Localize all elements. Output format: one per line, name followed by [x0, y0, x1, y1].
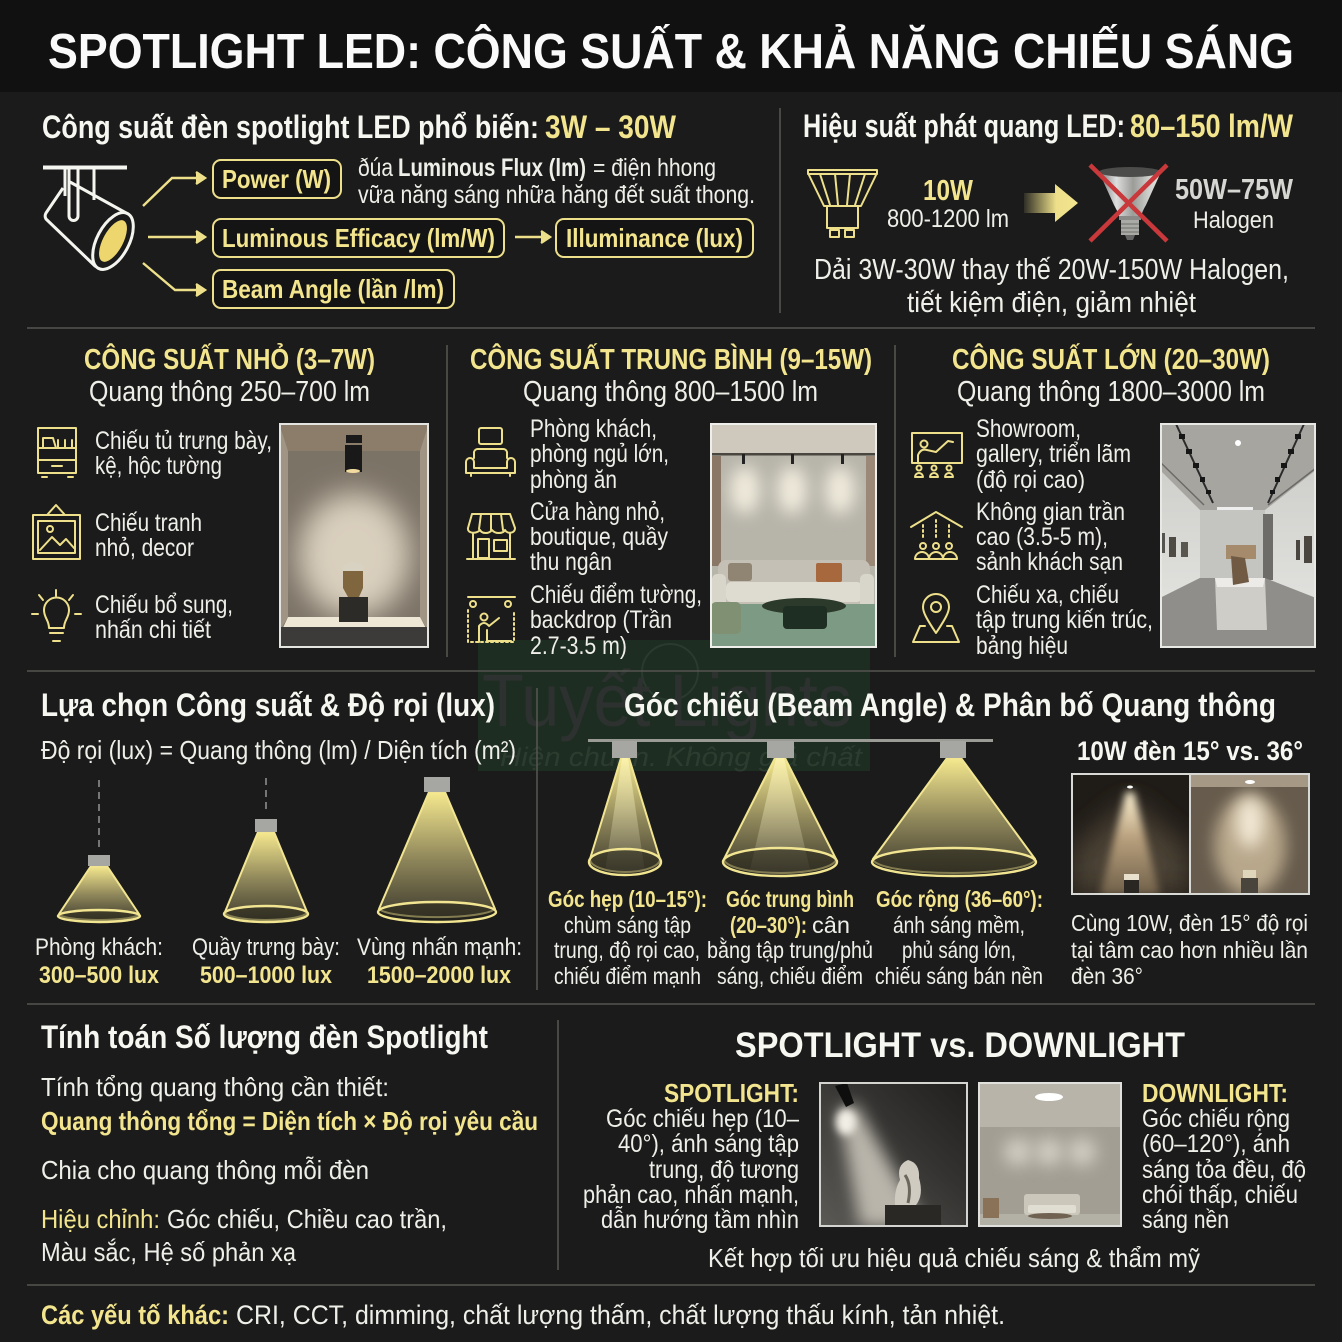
icon: shelf	[38, 428, 76, 477]
text: narrow beam	[548, 886, 707, 989]
cone: accent zone	[378, 777, 496, 922]
arrow: to power	[143, 172, 205, 206]
text: 10W: 800-1200 lm	[887, 205, 1009, 233]
cone: medium beam	[723, 741, 837, 876]
photo: beam comparison	[1071, 773, 1310, 895]
text: 50W-75W halogen	[1175, 174, 1294, 234]
cone: wide beam	[872, 741, 1036, 876]
heading: medium power: CÔNG SUẤT TRUNG BÌNH (9–15W)	[470, 342, 872, 376]
heading: high power: CÔNG SUẤT LỚN (20–30W)	[952, 342, 1270, 376]
text: paintings: nhỏ, decor	[95, 534, 194, 562]
text: range replacement: tiết kiệm điện, giảm nhiệt	[907, 287, 1196, 319]
heading: low power: CÔNG SUẤT NHỎ (3–7W)	[84, 342, 375, 376]
label: display lux: Quầy trưng bày:	[192, 934, 340, 961]
text: downlight description: (60–120°), ánh	[1142, 1130, 1290, 1158]
text: spotlight description: Góc chiếu hẹp (10–	[606, 1105, 799, 1133]
text: combined benefit: Kết hợp tối ưu hiệu quả chiếu sáng & thẩm mỹ	[708, 1243, 1200, 1273]
text: medium beam: (20–30°):	[730, 912, 807, 938]
text: wide beam: Góc rộng (36–60°):	[876, 886, 1043, 912]
text: narrow beam: chùm sáng tập	[564, 912, 691, 938]
heading: low power: Quang thông 250–700 lm	[89, 376, 370, 408]
label: living room lux: 300–500 lux	[39, 962, 160, 989]
text: showroom: (độ rọi cao)	[976, 466, 1085, 494]
footer: other factors: Các yếu tố khác:	[41, 1300, 229, 1330]
text: wide beam: ánh sáng mềm,	[893, 912, 1025, 938]
text: downlight description: chói thấp, chiếu	[1142, 1181, 1298, 1209]
text: 50W-75W halogen: Halogen	[1193, 207, 1274, 234]
text: adjustments: Góc chiếu, Chiều cao trần,	[167, 1204, 447, 1234]
text: medium beam	[707, 886, 873, 989]
panel: common wattage	[42, 109, 755, 308]
photo: gallery	[1160, 423, 1316, 648]
watermark: Tuyết Lights	[482, 659, 852, 742]
text: high ceiling: sảnh khách sạn	[976, 548, 1123, 576]
text: divide per lamp: Chia cho quang thông mỗi đèn	[41, 1155, 369, 1185]
watermark: Hiện chuẩn. Không giả chất	[500, 742, 864, 772]
heading: low power	[84, 342, 375, 408]
text: 10W	[887, 175, 1009, 233]
icon: map pin	[913, 594, 959, 642]
arrow: LED replaces halogen	[1024, 184, 1078, 222]
text: paintings: Chiếu tranh	[95, 509, 202, 537]
heading: common wattage: 3W – 30W	[545, 109, 677, 145]
text: 50W-75W halogen: 50W–75W	[1175, 174, 1294, 206]
text: downlight description: sáng nền	[1142, 1206, 1229, 1234]
label: luminous efficacy	[213, 219, 504, 257]
panel: choosing wattage and lux	[35, 687, 522, 989]
heading: efficacy: 80–150 lm/W	[1130, 108, 1294, 144]
arrow: to beam angle	[143, 263, 205, 296]
label: beam angle: Beam Angle (lần /lm)	[222, 274, 444, 304]
panel: 15 vs 36 degree comparison	[1071, 736, 1310, 989]
text: cabinets	[95, 427, 272, 480]
text: range replacement	[814, 254, 1289, 319]
footer: other factors: CRI, CCT, dimming, chất lượng thấm, chất lượng thấu kính, tản nhiệt.	[236, 1300, 1005, 1330]
icon: high ceiling hall	[911, 512, 962, 559]
text: living rooms	[530, 415, 669, 494]
icon: wall spot with figure	[468, 597, 515, 642]
text: long range: bảng hiệu	[976, 632, 1068, 660]
photo: spotlight on statue	[819, 1082, 968, 1227]
text: feature walls: 2.7-3.5 m)	[530, 632, 627, 660]
panel: quantity calculation	[41, 1019, 538, 1267]
text: long range: Chiếu xa, chiếu	[976, 581, 1119, 609]
text: spotlight description: trung, độ tương	[649, 1156, 799, 1184]
heading: high power: Quang thông 1800–3000 lm	[957, 376, 1265, 408]
label: display lux: 500–1000 lux	[200, 962, 333, 989]
photo: niche with sculpture	[279, 423, 429, 648]
text: comparison note	[1071, 910, 1308, 989]
text: narrow beam: Góc hẹp (10–15°):	[548, 886, 707, 912]
label: accent lux: Vùng nhấn mạnh:	[357, 934, 522, 961]
panel: low power	[32, 342, 429, 648]
text: comparison note: đèn 36°	[1071, 963, 1143, 989]
photo: downlight room	[978, 1082, 1122, 1227]
cone: narrow beam	[589, 741, 661, 875]
heading: choosing lux: Lựa chọn Công suất & Độ rọi (lux)	[41, 687, 495, 723]
icon: GU10 LED bulb	[808, 170, 877, 237]
label: power: Power (W)	[222, 164, 331, 194]
text: adjustments	[41, 1204, 447, 1267]
text: feature walls	[530, 581, 702, 660]
heading: medium power: Quang thông 800–1500 lm	[523, 376, 818, 408]
formula: lux: Độ rọi (lux) = Quang thông (lm) / Diện tích (m²)	[41, 735, 516, 765]
text: small shops: thu ngân	[530, 548, 612, 576]
text: showroom: gallery, triển lãm	[976, 440, 1131, 468]
text: comparison note: tại tâm cao hơn nhiều lần	[1071, 937, 1308, 963]
title band	[0, 0, 1342, 92]
icon: sofa	[466, 428, 515, 476]
formula: total flux: Quang thông tổng = Diện tích × Độ rọi yêu cầu	[41, 1106, 538, 1136]
text: flux description: Luminous Flux (lm)	[398, 154, 586, 182]
icon: track spotlight	[43, 168, 142, 276]
panel: beam angle	[548, 687, 1276, 989]
text: spotlight description: SPOTLIGHT:	[664, 1078, 799, 1108]
text: living rooms: Phòng khách,	[530, 415, 657, 443]
text: downlight description: sáng tỏa đều, độ	[1142, 1156, 1306, 1184]
text: medium beam: Góc trung bình	[726, 886, 854, 912]
text: high ceiling	[976, 498, 1125, 576]
text: downlight description: Góc chiếu rộng	[1142, 1105, 1290, 1133]
icon: crossed-out halogen bulb	[1090, 165, 1167, 241]
text: flux description: ðúa	[358, 154, 393, 182]
text: cabinets: Chiếu tủ trưng bày,	[95, 427, 272, 455]
text: long range: tập trung kiến trúc,	[976, 606, 1153, 634]
heading: medium power	[470, 342, 872, 408]
text: narrow beam: chiếu điểm mạnh	[554, 963, 701, 989]
panel: spotlight vs downlight	[583, 1026, 1306, 1273]
heading: spotlight vs downlight: SPOTLIGHT vs. DOWNLIGHT	[735, 1026, 1185, 1065]
watermark	[478, 640, 870, 772]
text: narrow beam: trung, độ rọi cao,	[554, 937, 700, 963]
heading: common wattage: Công suất đèn spotlight LED phổ biến:	[42, 109, 539, 145]
text: living rooms: phòng ngủ lớn,	[530, 440, 669, 468]
panel: medium power	[466, 342, 877, 660]
text: adjustments: Màu sắc, Hệ số phản xạ	[41, 1237, 296, 1267]
text: cabinets: kệ, hộc tường	[95, 452, 222, 480]
text: feature walls: backdrop (Trần	[530, 606, 672, 634]
text: feature walls: Chiếu điểm tường,	[530, 581, 702, 609]
label: living room lux: Phòng khách:	[35, 934, 163, 961]
text: adjustments: Hiệu chỉnh:	[41, 1204, 160, 1234]
text: accents: Chiếu bổ sung,	[95, 591, 233, 619]
text: spotlight description: phản cao, nhấn mạnh,	[583, 1181, 799, 1209]
label: power	[213, 160, 341, 198]
text: long range	[976, 581, 1153, 660]
heading: efficacy: Hiệu suất phát quang LED:	[803, 108, 1125, 144]
text: showroom	[976, 415, 1131, 494]
heading: comparison: 10W đèn 15° vs. 36°	[1077, 736, 1303, 766]
text: high ceiling: cao (3.5-5 m),	[976, 523, 1108, 551]
text: flux description: vữa năng sáng nhữa hăng đết suất thong.	[358, 181, 755, 209]
icon: light bulb	[32, 590, 81, 641]
text: spotlight description: dẫn hướng tầm nhìn	[601, 1205, 799, 1234]
text: small shops: boutique, quầy	[530, 523, 668, 551]
text: living rooms: phòng ăn	[530, 466, 617, 494]
text: high ceiling: Không gian trần	[976, 498, 1125, 526]
text: wide beam: phủ sáng lớn,	[902, 937, 1016, 963]
cone: display counter	[224, 778, 308, 922]
text: small shops	[530, 498, 668, 576]
label: display lux	[192, 934, 340, 989]
label: illuminance: Illuminance (lux)	[566, 223, 743, 253]
label: luminous efficacy: Luminous Efficacy (lm/W)	[222, 223, 495, 253]
heading: calculation: Tính toán Số lượng đèn Spotlight	[41, 1019, 488, 1055]
photo: living room with track lights	[710, 423, 877, 648]
panel: LED efficacy	[803, 108, 1294, 319]
text: wide beam: chiếu sáng bán nền	[875, 963, 1043, 989]
text: small shops: Cửa hàng nhỏ,	[530, 498, 665, 526]
text: accents: nhấn chi tiết	[95, 616, 211, 644]
text: spotlight description	[583, 1078, 799, 1234]
icon: picture	[33, 505, 80, 559]
text: flux description: = điện hhong	[593, 154, 716, 182]
icon: presentation	[912, 433, 962, 477]
text: comparison note: Cùng 10W, đèn 15° độ rọi	[1071, 910, 1308, 936]
text: downlight description: DOWNLIGHT:	[1142, 1078, 1288, 1108]
text: paintings	[95, 509, 202, 562]
panel: high power	[911, 342, 1316, 660]
label: illuminance	[556, 219, 753, 257]
text: downlight description	[1142, 1078, 1306, 1234]
label: living room lux	[35, 934, 163, 989]
text: spotlight description: 40°), ánh sáng tập	[618, 1130, 799, 1158]
arrow: to efficacy	[148, 231, 205, 243]
text: showroom: Showroom,	[976, 415, 1081, 443]
label: accent lux	[357, 934, 522, 989]
text: medium beam: sáng, chiếu điểm	[717, 963, 863, 989]
text: medium beam: bằng tập trung/phủ	[707, 937, 873, 963]
text: wide beam	[875, 886, 1043, 989]
icon: shop	[467, 514, 515, 559]
text: medium beam: cân	[812, 912, 850, 938]
text: 10W: 10W	[923, 175, 974, 207]
text: flux description	[358, 154, 755, 209]
arrow: efficacy to illuminance	[515, 231, 550, 243]
text: total flux: Tính tổng quang thông cần thiết:	[41, 1072, 389, 1102]
label: accent lux: 1500–2000 lux	[367, 962, 512, 989]
heading: high power	[952, 342, 1270, 408]
track rail	[588, 739, 993, 742]
cone: living room	[58, 780, 140, 922]
text: accents	[95, 591, 233, 644]
